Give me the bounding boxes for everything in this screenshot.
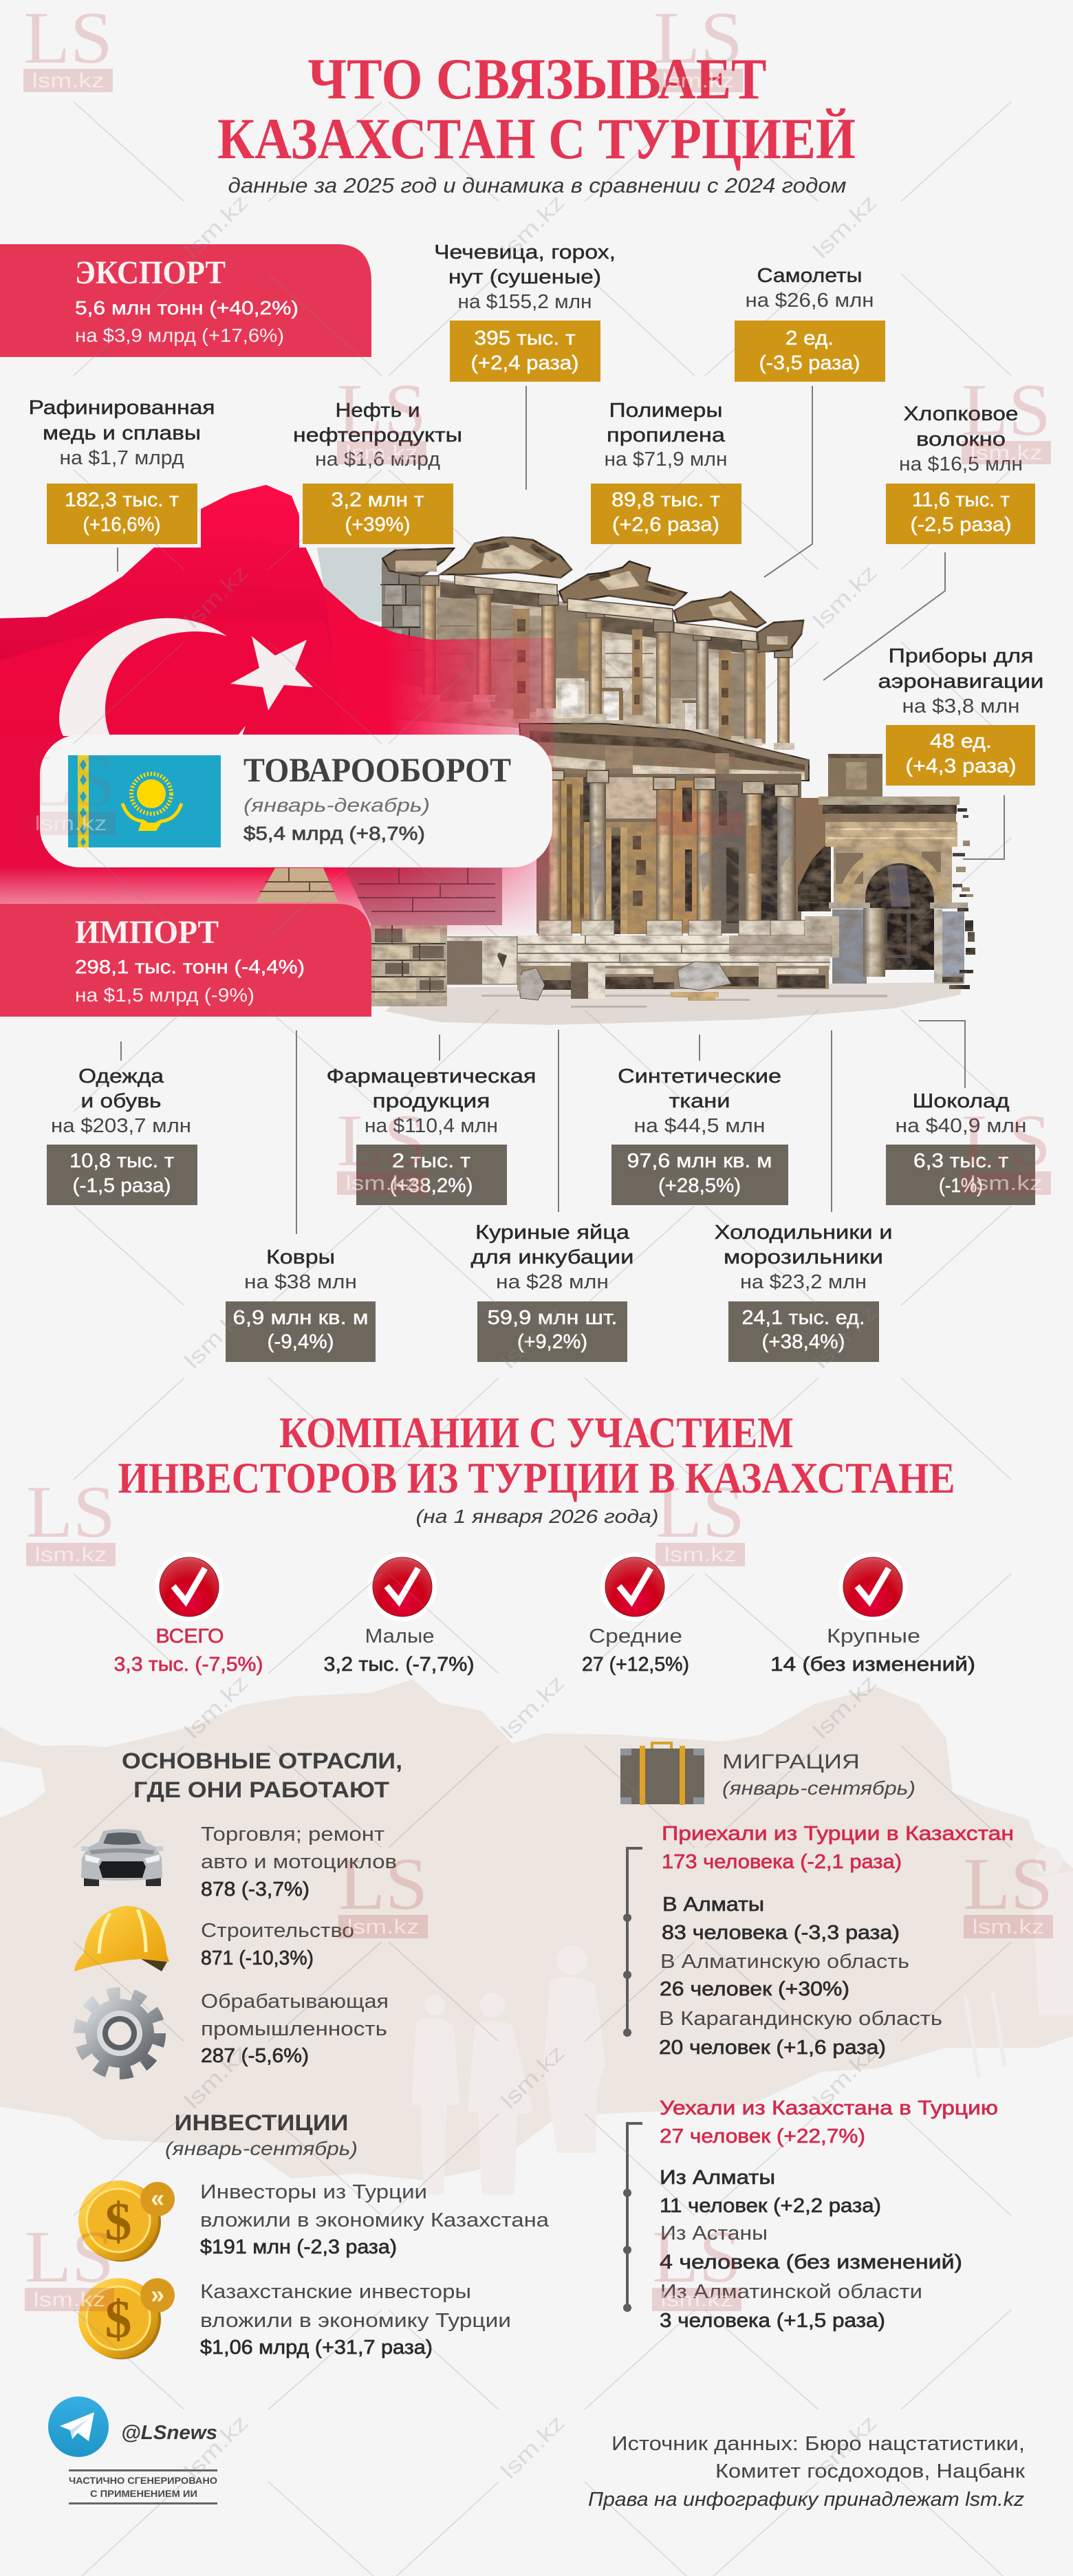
LS logo watermarks: lsm.kz bbox=[33, 2288, 106, 2311]
stat: small companies: 3,2 тыс. (-7,7%) bbox=[323, 1654, 475, 1676]
title bbox=[217, 47, 856, 171]
investment: into Turkey: $1,06 млрд (+31,7 раза) bbox=[200, 2337, 433, 2359]
investment: into Turkey bbox=[200, 2281, 511, 2359]
export item: copper: на $1,7 млрд bbox=[59, 447, 184, 469]
icon: coin out: » bbox=[151, 2280, 164, 2308]
industry: trade bbox=[201, 1823, 397, 1901]
import item: eggs: Куриные яйца bbox=[475, 1222, 630, 1244]
rubble bbox=[519, 966, 829, 989]
arrivals list: 173 человека (-2,1 раза) bbox=[662, 1851, 902, 1873]
icon: coin in: « bbox=[151, 2184, 164, 2212]
ornate pilasters bbox=[513, 609, 766, 743]
investment: into Kazakhstan: вложили в экономику Казахстана bbox=[200, 2209, 550, 2231]
stat: medium companies bbox=[582, 1552, 689, 1676]
export item: oil: (+39%) bbox=[345, 514, 410, 536]
export item: lentils: нут (сушеные) bbox=[448, 266, 601, 288]
AI generated note: С ПРИМЕНЕНИЕМ ИИ bbox=[90, 2488, 197, 2499]
lower capitals bbox=[545, 770, 799, 797]
upper storey wall bbox=[382, 568, 766, 744]
import item: pharma: (+38,2%) bbox=[389, 1175, 473, 1197]
arrivals list: Приехали из Турции в Казахстан bbox=[662, 1823, 1014, 1845]
arrivals list: В Алматы bbox=[662, 1894, 764, 1916]
industry: trade: Торговля; ремонт bbox=[201, 1823, 384, 1846]
export item: navigation devices: Приборы для bbox=[889, 645, 1033, 667]
import item: clothes: на $203,7 млн bbox=[51, 1115, 191, 1137]
lower storey bbox=[536, 774, 801, 933]
import item: eggs: 59,9 млн шт. bbox=[487, 1307, 618, 1329]
export item: cotton: Хлопковое bbox=[904, 403, 1018, 425]
heading: migration: (январь-сентябрь) bbox=[722, 1777, 915, 1799]
import item: clothes: Одежда bbox=[78, 1065, 164, 1087]
export item: cotton bbox=[886, 403, 1035, 544]
export item: navigation devices: аэронавигации bbox=[878, 671, 1044, 693]
export item: cotton: волокно bbox=[916, 429, 1006, 451]
industry: manufacturing: промышленность bbox=[201, 2018, 387, 2040]
investment: into Turkey: вложили в экономику Турции bbox=[200, 2310, 511, 2332]
subtitle: данные за 2025 год и динамика в сравнении с 2024 годом bbox=[228, 173, 846, 197]
icon: coin out bbox=[78, 2278, 175, 2359]
lower columns bbox=[548, 772, 561, 922]
export item: polymers bbox=[591, 400, 741, 544]
diagonal watermarks: lsm.kz bbox=[180, 2410, 253, 2484]
turnover value: $5,4 млрд (+8,7%) bbox=[243, 823, 425, 844]
heading: industries: ГДЕ ОНИ РАБОТАЮТ bbox=[133, 1777, 390, 1802]
heading: migration bbox=[722, 1751, 915, 1799]
diagonal watermarks: lsm.kz bbox=[808, 190, 882, 263]
import item: pharma: на $110,4 млн bbox=[365, 1115, 498, 1137]
import item: synthetic fabrics: 97,6 млн кв. м bbox=[627, 1150, 772, 1172]
stat: large companies: Крупные bbox=[827, 1625, 920, 1647]
arrivals list bbox=[659, 1823, 1014, 2059]
industry: construction bbox=[201, 1920, 354, 1969]
export item: copper: медь и сплавы bbox=[43, 422, 201, 444]
icon: car bbox=[81, 1829, 163, 1886]
import item: refrigerators: Холодильники и bbox=[714, 1222, 893, 1244]
LS logo watermarks: lsm.kz bbox=[973, 1916, 1044, 1938]
industry: construction: Строительство bbox=[201, 1920, 354, 1942]
diagonal watermarks: lsm.kz bbox=[496, 2040, 570, 2114]
star bbox=[230, 636, 313, 711]
import item: pharma bbox=[326, 1065, 536, 1205]
export item: lentils: 395 тыс. т bbox=[475, 327, 575, 349]
import item: carpets: (-9,4%) bbox=[267, 1331, 334, 1353]
departures list: 27 человек (+22,7%) bbox=[660, 2125, 865, 2147]
icon: gear bbox=[82, 1995, 158, 2071]
export item: oil: Нефть и bbox=[336, 400, 420, 422]
right gate wall bbox=[796, 798, 830, 911]
export item: cotton: 11,6 тыс. т bbox=[912, 489, 1010, 511]
icon: coin in: $ bbox=[105, 2191, 132, 2251]
column bases bbox=[539, 920, 805, 935]
export item: lentils bbox=[434, 241, 616, 382]
panel: export bbox=[0, 244, 371, 357]
import item: eggs: для инкубации bbox=[470, 1246, 634, 1268]
heading: investments: (январь-сентябрь) bbox=[165, 2138, 358, 2159]
import volume: 298,1 тыс. тонн (-4,4%) bbox=[75, 956, 305, 977]
temple illustration bbox=[316, 537, 975, 1025]
LS logo watermarks: LS bbox=[964, 1843, 1053, 1925]
departures list: 11 человек (+2,2 раза) bbox=[660, 2195, 881, 2217]
heading: industries bbox=[122, 1749, 402, 1802]
LS logo watermarks: LS bbox=[338, 1843, 428, 1925]
silhouettes of migrants bbox=[411, 1847, 1073, 2194]
timeline: departures bbox=[623, 2123, 642, 2312]
diagonal watermarks bbox=[180, 190, 882, 2484]
import item: synthetic fabrics: (+28,5%) bbox=[658, 1175, 741, 1197]
export item: aircraft bbox=[735, 265, 885, 382]
departures list: Из Астаны bbox=[660, 2222, 768, 2244]
stat: large companies: 14 (без изменений) bbox=[770, 1654, 975, 1676]
diagonal watermarks: lsm.kz bbox=[180, 560, 253, 634]
LS logo watermarks: lsm.kz bbox=[660, 2288, 733, 2311]
import item: chocolate bbox=[886, 1090, 1035, 1205]
stat: large companies bbox=[770, 1552, 975, 1676]
export item: copper: (+16,6%) bbox=[83, 514, 161, 536]
stat: total companies: 3,3 тыс. (-7,5%) bbox=[114, 1654, 263, 1676]
export item: copper: Рафинированная bbox=[29, 397, 215, 419]
export item: lentils: (+2,4 раза) bbox=[470, 352, 579, 374]
column marble patina bbox=[592, 805, 792, 905]
arrivals list: 20 человек (+1,6 раза) bbox=[659, 2037, 886, 2059]
LS logo watermarks: LS bbox=[653, 740, 743, 822]
arrivals list: В Алматинскую область bbox=[660, 1951, 909, 1973]
investment: into Kazakhstan: $191 млн (-2,3 раза) bbox=[200, 2236, 397, 2258]
diagonal watermarks: lsm.kz bbox=[496, 2410, 570, 2484]
import item: clothes: (-1,5 раза) bbox=[73, 1175, 171, 1197]
import item: carpets: Ковры bbox=[266, 1246, 335, 1268]
icon: coin in bbox=[78, 2180, 175, 2262]
export item: navigation devices bbox=[878, 645, 1044, 786]
import item: pharma: продукция bbox=[373, 1090, 490, 1112]
temple sky patch bbox=[316, 543, 440, 623]
import value: на $1,5 млрд (-9%) bbox=[75, 984, 254, 1006]
industry: trade: авто и мотоциклов bbox=[201, 1851, 397, 1873]
arrivals list: 26 человек (+30%) bbox=[660, 1978, 849, 2000]
import item: chocolate: Шоколад bbox=[912, 1090, 1010, 1112]
diagonal watermarks: lsm.kz bbox=[180, 1670, 253, 1744]
windows and frames bbox=[556, 678, 585, 718]
crescent bbox=[59, 618, 227, 736]
import item: synthetic fabrics: ткани bbox=[669, 1090, 730, 1112]
timeline: arrivals bbox=[623, 1848, 642, 2037]
diagonal watermarks: lsm.kz bbox=[808, 2040, 882, 2114]
export item: oil: нефтепродукты bbox=[293, 424, 462, 446]
temple steps bbox=[515, 935, 830, 970]
AI generated note bbox=[69, 2469, 217, 2504]
icon: suitcase bbox=[620, 1743, 704, 1805]
diagonal watermarks: lsm.kz bbox=[808, 1670, 882, 1744]
companies date: (на 1 января 2026 года) bbox=[415, 1506, 659, 1527]
import item: eggs bbox=[470, 1222, 634, 1362]
upper capitals bbox=[420, 576, 792, 658]
import item: refrigerators: (+38,4%) bbox=[762, 1331, 845, 1353]
LS logo watermarks: LS bbox=[962, 1100, 1051, 1182]
LS logo watermarks: lsm.kz bbox=[970, 1172, 1043, 1195]
LS logo watermarks: lsm.kz bbox=[664, 1544, 736, 1566]
stat: small companies: Малые bbox=[365, 1625, 435, 1647]
heading: companies bbox=[118, 1408, 955, 1502]
import item: refrigerators bbox=[714, 1222, 893, 1362]
diagonal watermarks: lsm.kz bbox=[808, 560, 882, 634]
title: КАЗАХСТАН С ТУРЦИЕЙ bbox=[217, 107, 856, 171]
source note: Источник данных: Бюро нацстатистики, bbox=[611, 2433, 1025, 2455]
LS logo watermarks: LS bbox=[25, 2216, 114, 2298]
import item: chocolate: (-1%) bbox=[939, 1175, 983, 1197]
export item: polymers: (+2,6 раза) bbox=[612, 514, 719, 536]
LS logo watermarks: lsm.kz bbox=[34, 812, 107, 835]
heading: export: ЭКСПОРТ bbox=[75, 255, 226, 291]
export item: lentils: на $155,2 млн bbox=[458, 291, 592, 313]
turnover heading: ТОВАРООБОРОТ bbox=[243, 750, 511, 789]
diagonal watermarks: lsm.kz bbox=[180, 1300, 253, 1374]
import item: refrigerators: морозильники bbox=[724, 1246, 883, 1268]
export item: polymers: пропилена bbox=[607, 424, 726, 446]
departures list: Уехали из Казахстана в Турцию bbox=[660, 2097, 998, 2119]
LS logo watermarks: LS bbox=[337, 369, 426, 451]
LS logo watermarks: lsm.kz bbox=[345, 1172, 418, 1195]
export value: на $3,9 млрд (+17,6%) bbox=[75, 325, 284, 346]
heading: companies: ИНВЕСТОРОВ ИЗ ТУРЦИИ В КАЗАХСТАНЕ bbox=[118, 1453, 955, 1502]
LS logo watermarks: LS bbox=[26, 740, 116, 822]
LS logo watermarks: LS bbox=[652, 2216, 741, 2298]
gate broken edge bbox=[942, 808, 975, 989]
stat: medium companies: Средние bbox=[589, 1625, 682, 1647]
departures list: Из Алматы bbox=[660, 2167, 775, 2189]
diagonal watermarks: lsm.kz bbox=[808, 2410, 882, 2484]
industry: manufacturing: Обрабатывающая bbox=[201, 1991, 389, 2013]
export item: oil bbox=[293, 400, 462, 544]
departures list: 3 человека (+1,5 раза) bbox=[660, 2310, 885, 2332]
flag cloth bbox=[0, 485, 554, 935]
import item: carpets: 6,9 млн кв. м bbox=[232, 1307, 369, 1329]
import item: carpets bbox=[226, 1246, 376, 1362]
investment: into Kazakhstan bbox=[200, 2181, 550, 2258]
import item: synthetic fabrics bbox=[611, 1065, 788, 1205]
heading: companies: КОМПАНИИ С УЧАСТИЕМ bbox=[279, 1408, 794, 1457]
import item: refrigerators: 24,1 тыс. ед. bbox=[741, 1307, 865, 1329]
heading: import: ИМПОРТ bbox=[75, 914, 219, 951]
export item: lentils: Чечевица, горох, bbox=[434, 241, 616, 263]
stat: small companies bbox=[323, 1552, 475, 1676]
industry: construction: 871 (-10,3%) bbox=[201, 1947, 314, 1969]
LS logo watermarks: lsm.kz bbox=[345, 442, 418, 464]
import item: clothes bbox=[47, 1065, 197, 1205]
industry: trade: 878 (-3,7%) bbox=[201, 1879, 310, 1901]
import item: pharma: 2 тыс. т bbox=[392, 1150, 470, 1172]
middle entablature bbox=[519, 724, 809, 781]
stat: medium companies: 27 (+12,5%) bbox=[582, 1654, 689, 1676]
LS logo watermarks: LS bbox=[962, 369, 1051, 451]
import item: chocolate: 6,3 тыс. т bbox=[913, 1150, 1008, 1172]
LS logo watermarks: LS bbox=[655, 1471, 745, 1553]
export item: aircraft: Самолеты bbox=[757, 265, 863, 287]
heading: migration: МИГРАЦИЯ bbox=[722, 1751, 860, 1773]
departures list: 4 человека (без изменений) bbox=[660, 2251, 962, 2273]
panel: import bbox=[0, 904, 371, 1017]
panel: turnover bbox=[40, 735, 552, 867]
lower-left stones bbox=[370, 925, 447, 1006]
export item: oil: 3,2 млн т bbox=[332, 489, 424, 511]
pediments bbox=[382, 548, 454, 576]
import item: clothes: и обувь bbox=[81, 1090, 161, 1112]
export item: cotton: (-2,5 раза) bbox=[911, 514, 1011, 536]
export item: aircraft: на $26,6 млн bbox=[746, 290, 874, 312]
stat: total companies bbox=[114, 1552, 263, 1676]
heading: industries: ОСНОВНЫЕ ОТРАСЛИ, bbox=[122, 1749, 402, 1773]
diagonal watermarks: lsm.kz bbox=[496, 1670, 570, 1744]
title: ЧТО СВЯЗЫВАЕТ bbox=[308, 47, 766, 111]
LS logo watermarks: lsm.kz bbox=[970, 442, 1043, 464]
icon: helmet bbox=[74, 1906, 169, 1971]
arrivals list: В Карагандинскую область bbox=[659, 2008, 942, 2030]
AI generated note: ЧАСТИЧНО СГЕНЕРИРОВАНО bbox=[69, 2475, 217, 2486]
source note bbox=[588, 2433, 1025, 2511]
pedestal bbox=[446, 937, 517, 984]
diagonal watermarks: lsm.kz bbox=[496, 1300, 570, 1374]
upper plinths bbox=[418, 695, 794, 750]
departures list: Из Алматинской области bbox=[660, 2281, 922, 2303]
icon: Kazakhstan flag bbox=[68, 755, 221, 847]
export item: cotton: на $16,5 млн bbox=[899, 453, 1023, 475]
export item: copper bbox=[29, 397, 215, 544]
heading: investments: ИНВЕСТИЦИИ bbox=[175, 2110, 348, 2135]
export item: copper: 182,3 тыс. т bbox=[65, 489, 179, 511]
LS logo watermarks: LS bbox=[337, 1100, 426, 1182]
export volume: 5,6 млн тонн (+40,2%) bbox=[75, 297, 299, 318]
Turkish flag bbox=[0, 485, 554, 935]
LS logo watermarks: LS bbox=[26, 1471, 116, 1553]
stones seen through flag bbox=[256, 868, 338, 902]
export item: polymers: на $71,9 млн bbox=[604, 448, 728, 470]
export item: navigation devices: (+4,3 раза) bbox=[905, 755, 1017, 777]
upper columns bbox=[422, 577, 436, 697]
import item: synthetic fabrics: на $44,5 млн bbox=[634, 1115, 765, 1137]
import item: refrigerators: на $23,2 млн bbox=[740, 1271, 867, 1293]
temple ground bbox=[385, 982, 963, 1025]
export item: navigation devices: 48 ед. bbox=[930, 730, 992, 753]
LS logo watermarks: lsm.kz bbox=[32, 69, 105, 92]
departures list bbox=[660, 2097, 998, 2332]
import item: eggs: (+9,2%) bbox=[517, 1331, 587, 1353]
telegram handle: @LSnews bbox=[121, 2422, 217, 2444]
gate arch bbox=[845, 853, 941, 905]
export item: aircraft: (-3,5 раза) bbox=[759, 352, 860, 374]
investment: into Turkey: Казахстанские инвесторы bbox=[200, 2281, 471, 2303]
export item: polymers: 89,8 тыс. т bbox=[611, 489, 720, 511]
diagonal watermarks: lsm.kz bbox=[808, 1300, 882, 1374]
import item: chocolate: на $40,9 млн bbox=[896, 1115, 1026, 1137]
industry: manufacturing: 287 (-5,6%) bbox=[201, 2045, 309, 2067]
diagonal watermarks: lsm.kz bbox=[496, 190, 570, 263]
heading: investments bbox=[165, 2110, 358, 2159]
import item: clothes: 10,8 тыс. т bbox=[69, 1150, 174, 1172]
export item: oil: на $1,6 млрд bbox=[315, 448, 440, 470]
diagonal watermarks: lsm.kz bbox=[180, 190, 253, 263]
import item: carpets: на $38 млн bbox=[244, 1271, 357, 1293]
diagonal watermarks: lsm.kz bbox=[180, 2040, 253, 2114]
LS logo watermarks: lsm.kz bbox=[34, 1544, 107, 1566]
export item: aircraft: 2 ед. bbox=[785, 327, 834, 349]
icon: coin out: $ bbox=[105, 2289, 132, 2349]
import item: pharma: Фармацевтическая bbox=[326, 1065, 536, 1087]
export item: navigation devices: на $3,8 млн bbox=[902, 695, 1019, 717]
LS logo watermarks: lsm.kz bbox=[662, 69, 735, 92]
investment: into Kazakhstan: Инвесторы из Турции bbox=[200, 2181, 427, 2203]
turnover period: (январь-декабрь) bbox=[243, 794, 430, 816]
left ruined stone wall bbox=[382, 552, 422, 688]
source note: Права на инфографику принадлежат lsm.kz bbox=[588, 2489, 1025, 2511]
import item: synthetic fabrics: Синтетические bbox=[618, 1065, 781, 1087]
icon: telegram bbox=[48, 2396, 109, 2457]
source note: Комитет госдоходов, Нацбанк bbox=[715, 2460, 1025, 2482]
background map of Turkey bbox=[0, 1679, 1073, 2194]
industry: manufacturing bbox=[201, 1991, 389, 2067]
LS logo watermarks: lsm.kz bbox=[347, 1916, 420, 1938]
connector lines bbox=[118, 386, 1004, 1234]
arrivals list: 83 человека (-3,3 раза) bbox=[662, 1922, 900, 1944]
export item: polymers: Полимеры bbox=[609, 400, 722, 422]
import item: eggs: на $28 млн bbox=[496, 1271, 609, 1293]
stat: total companies: ВСЕГО bbox=[155, 1625, 224, 1647]
